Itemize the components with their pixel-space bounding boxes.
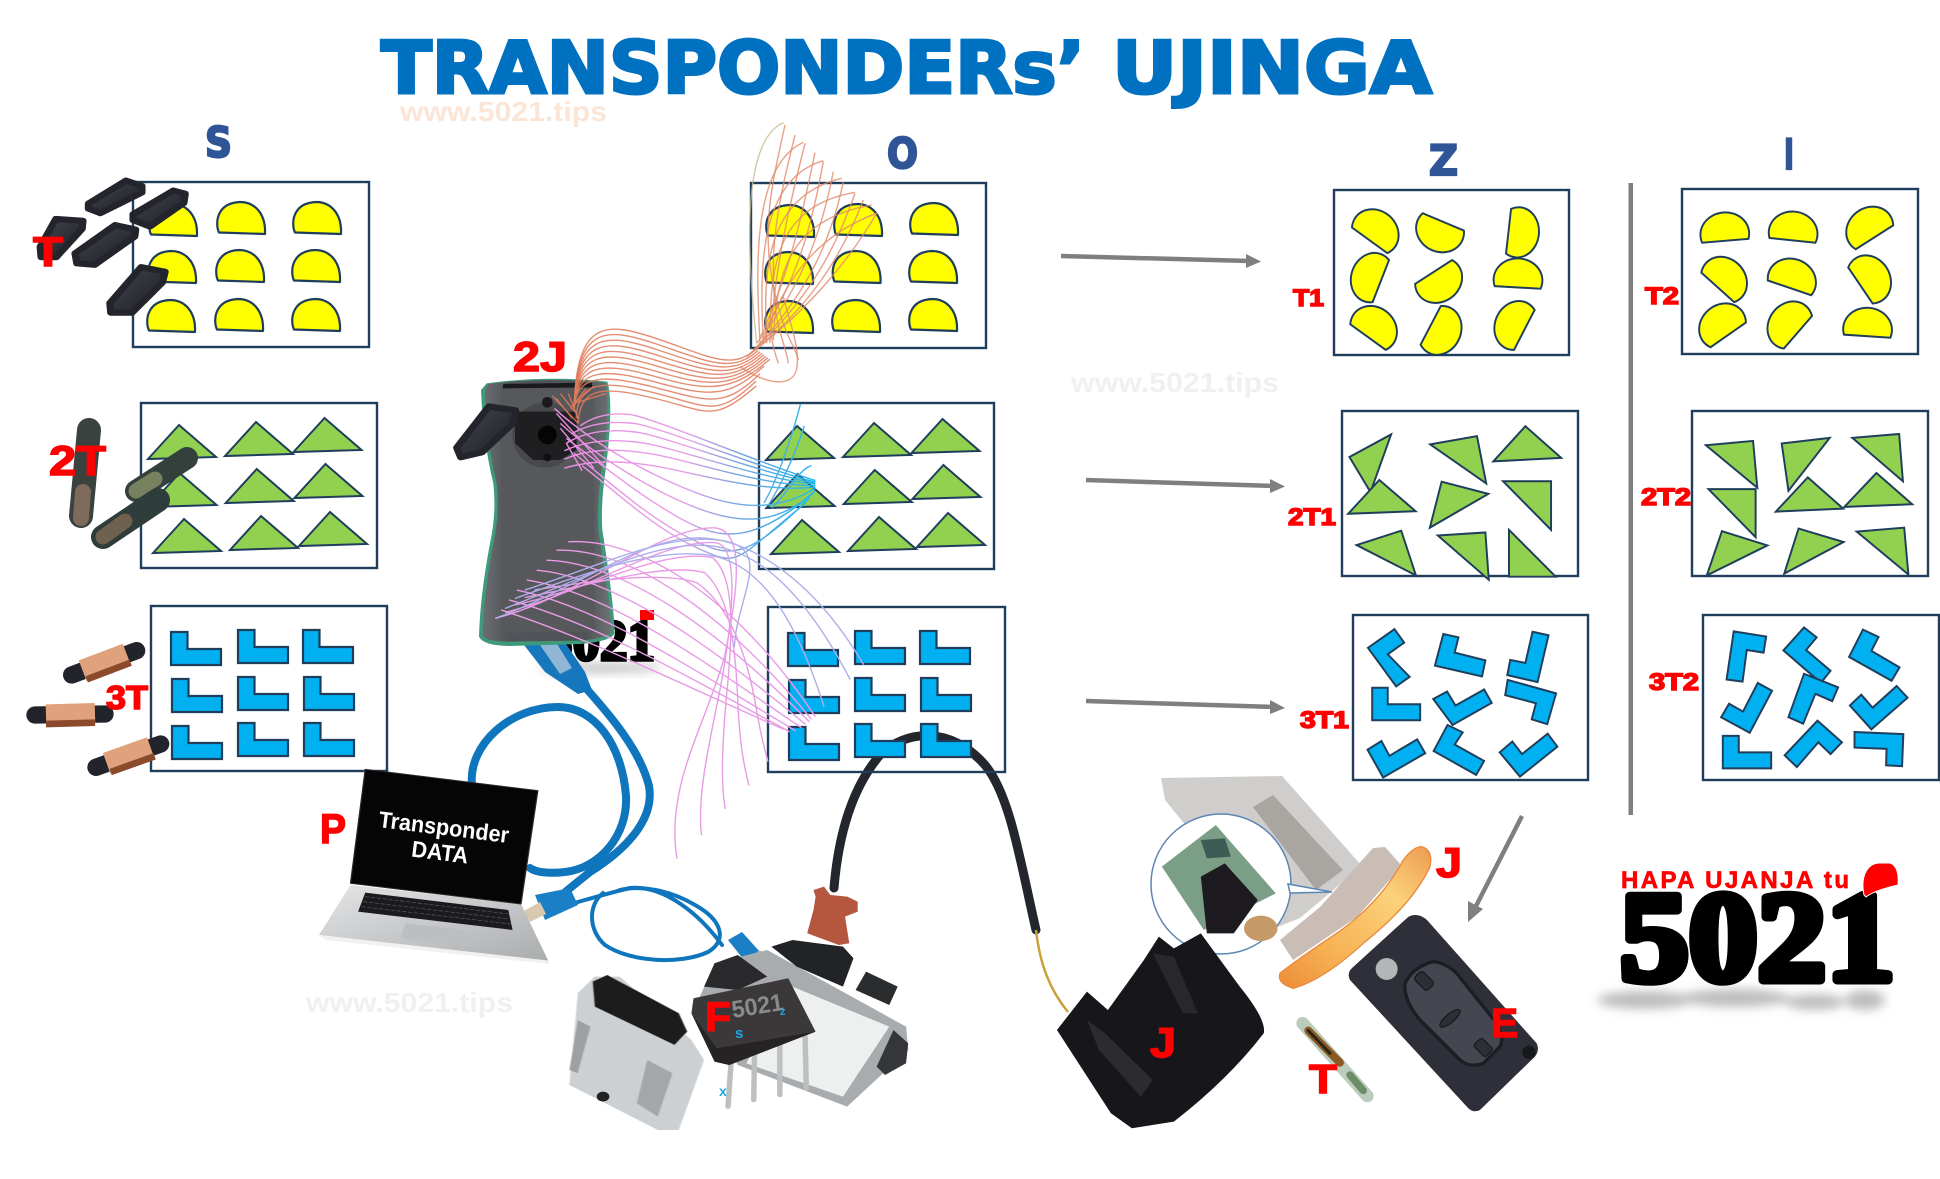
panel: S green triangles — [141, 403, 377, 568]
label J top: J — [1436, 839, 1462, 886]
arrow: row 2 — [1086, 479, 1285, 493]
label P: P — [320, 805, 346, 852]
panel: S blue L shapes — [151, 606, 387, 771]
label 2J: 2J — [513, 333, 567, 380]
device: transponder programmer — [479, 379, 615, 646]
small logo behind device: 5021 — [545, 608, 655, 673]
lower pink fan lines — [495, 528, 815, 859]
panel: I yellow half-moons T2 — [1682, 189, 1918, 354]
USB cable loops to laptop — [472, 686, 650, 908]
label 3T1: 3T1 — [1300, 707, 1349, 734]
panel: O yellow half-moons — [751, 183, 986, 348]
logo: HAPA UJANJA tu 5021: HAPA UJANJA tu — [1621, 867, 1849, 894]
label 3T2: 3T2 — [1649, 669, 1699, 696]
panel: O blue L shapes — [768, 607, 1005, 772]
panel: I green triangles 2T2 — [1692, 411, 1928, 576]
watermark right: www.5021.tips — [1070, 367, 1279, 398]
label 2T2: 2T2 — [1641, 484, 1691, 511]
column heading S: S — [205, 118, 232, 167]
device inserted chip — [457, 406, 516, 457]
glass transponders group 2T — [81, 430, 187, 537]
panel: Z blue L shapes 3T1 — [1353, 615, 1588, 780]
IC chip: x — [719, 1083, 727, 1099]
ECU module — [569, 975, 704, 1130]
copper transponders group 3T — [35, 651, 161, 772]
label F: F — [705, 994, 731, 1040]
arrow: row 3 — [1086, 700, 1285, 714]
logo: HAPA UJANJA tu 5021: 5021 — [1620, 866, 1895, 1008]
laptop — [319, 769, 549, 964]
label E: E — [1491, 1000, 1518, 1046]
panel: I blue L shapes 3T2 — [1703, 615, 1939, 780]
watermark bottom: www.5021.tips — [305, 987, 513, 1018]
USB cable to control module — [522, 888, 771, 974]
black cable from connector to housing — [834, 736, 1068, 1012]
title: UJINGA — [1112, 26, 1432, 110]
pink to blue fan lines — [554, 404, 815, 558]
laptop screen text: DATA — [410, 836, 470, 868]
panel: Z yellow half-moons T1 — [1334, 190, 1569, 355]
label T lower: T — [1309, 1056, 1337, 1102]
label 3T: 3T — [106, 679, 148, 716]
label T2: T2 — [1645, 283, 1679, 310]
watermark top: www.5021.tips — [399, 96, 607, 127]
glass transponder — [1303, 1023, 1367, 1096]
panel: S yellow half-moons — [133, 182, 369, 347]
orange fan net over O panel — [740, 123, 877, 382]
black antenna housing — [1057, 933, 1264, 1128]
arrow: row 1 — [1061, 254, 1261, 268]
key chips group T — [40, 181, 185, 313]
control module — [700, 887, 908, 1107]
column heading O: O — [887, 129, 918, 178]
panel: Z green triangles 2T1 — [1342, 411, 1578, 580]
magnifier circle with PCB — [1151, 814, 1332, 954]
USB plug at device — [524, 644, 592, 694]
IC chip — [691, 978, 816, 1107]
column heading Z: Z — [1429, 136, 1458, 185]
label 2T1: 2T1 — [1288, 504, 1336, 531]
panel: O green triangles — [759, 403, 994, 569]
lower blue-violet fan lines — [495, 538, 864, 707]
label J housing: J — [1150, 1019, 1176, 1066]
orange coil ring — [1279, 847, 1431, 988]
IC chip: 5021 — [730, 989, 785, 1024]
title — [381, 26, 1432, 110]
label T1: T1 — [1293, 285, 1324, 312]
IC chip: s — [735, 1025, 743, 1042]
orange fan ribbon — [552, 329, 770, 423]
key fob — [1349, 915, 1538, 1111]
ignition barrel ghost part — [1161, 776, 1402, 960]
vertical divider — [1628, 183, 1633, 815]
column heading I: I — [1784, 130, 1794, 179]
label T: T — [33, 228, 63, 275]
title: TRANSPONDERs’ — [381, 26, 1085, 110]
label 2T: 2T — [49, 437, 106, 484]
IC chip: z — [780, 1006, 786, 1018]
laptop screen text — [377, 806, 511, 868]
arrow: down to key — [1468, 816, 1522, 922]
laptop screen text: Transponder — [377, 806, 511, 848]
